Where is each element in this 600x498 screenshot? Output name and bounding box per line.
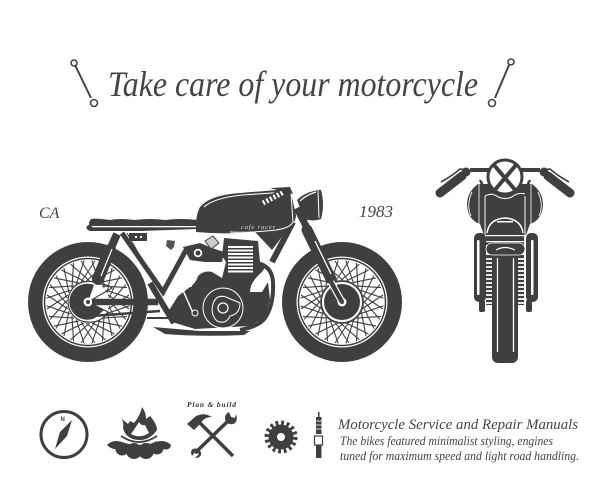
engine block	[168, 236, 270, 329]
icon: campfire	[107, 407, 171, 459]
icon: right wrench	[488, 59, 514, 106]
motorcycle side view	[28, 187, 402, 362]
seat	[86, 219, 198, 231]
icon: left wrench	[71, 60, 98, 106]
icon: compass: N	[60, 417, 65, 423]
icon: hammer and wrench	[187, 400, 237, 458]
text block: manuals	[337, 417, 579, 463]
rear shock absorber	[98, 249, 112, 279]
air filter	[166, 240, 175, 250]
fuel tank	[196, 189, 296, 233]
icon: spark plug	[314, 412, 322, 458]
tank lettering: cafe racer	[241, 224, 275, 231]
crankcase cover	[203, 288, 243, 328]
carburettor	[205, 236, 219, 249]
headlight	[297, 190, 323, 220]
tank and fairing	[467, 180, 543, 236]
icon: compass	[41, 412, 87, 458]
label: CA: CA	[39, 205, 60, 222]
title: Take care of your motorcycle	[108, 64, 478, 104]
front fork	[297, 208, 342, 302]
exhaust pipe	[153, 263, 273, 336]
icon: gear	[267, 423, 295, 451]
headlight with cross	[488, 160, 522, 194]
front tyre	[486, 243, 525, 363]
engine fins	[486, 255, 524, 305]
right fork leg	[526, 233, 538, 312]
cylinder fins	[228, 247, 253, 272]
rear wheel	[28, 242, 148, 362]
handlebars	[440, 168, 570, 193]
fuel cap	[263, 187, 293, 203]
description line 2: tuned for maximum speed and light road handling.	[340, 449, 579, 463]
battery box	[129, 233, 147, 241]
front fender arc	[486, 217, 524, 245]
label: Plan & build: Plan & build	[187, 400, 236, 409]
left fork leg	[474, 233, 486, 312]
description line 1: The bikes featured minimalist styling, engines	[340, 434, 553, 448]
heading: Motorcycle Service and Repair Manuals	[337, 417, 578, 433]
frame	[92, 222, 293, 323]
motorcycle front view	[440, 160, 570, 363]
front wheel	[282, 242, 402, 362]
kick lever	[182, 288, 193, 313]
label: 1983: 1983	[359, 202, 393, 221]
